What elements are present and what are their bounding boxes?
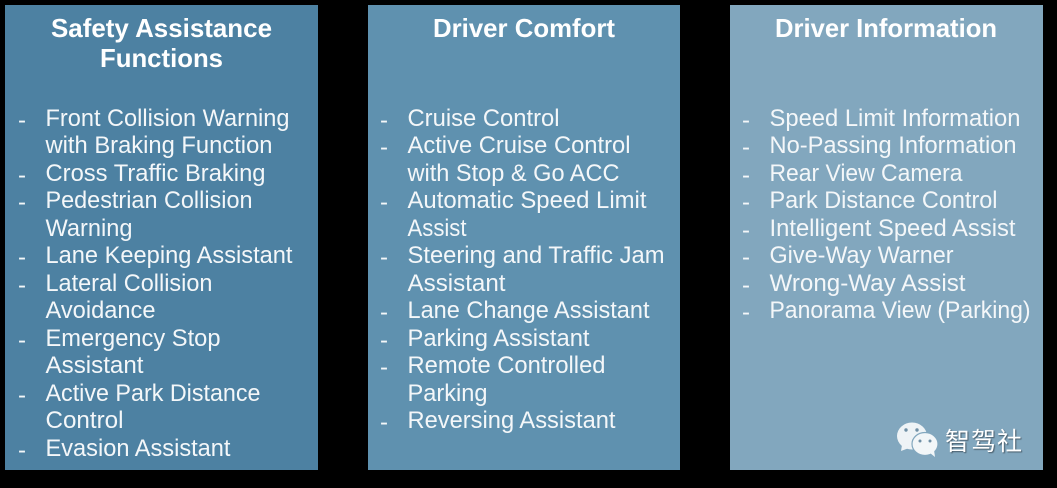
list: safety functions: Lane Keeping Assistant bbox=[46, 242, 293, 269]
list: safety functions: - bbox=[18, 437, 26, 464]
list: information functions: Intelligent Speed Assist bbox=[770, 215, 1016, 242]
list: information functions: Speed Limit Information bbox=[770, 105, 1020, 132]
list: comfort functions: - bbox=[380, 409, 388, 436]
list: information functions: No-Passing Information bbox=[770, 132, 1016, 159]
heading: safety assistance functions: Functions bbox=[100, 43, 223, 73]
list: safety functions: Assistant bbox=[46, 352, 144, 379]
heading: safety assistance functions bbox=[51, 13, 272, 73]
list: safety functions: Pedestrian Collision bbox=[46, 187, 252, 214]
list: comfort functions: Parking Assistant bbox=[408, 325, 590, 352]
list: information functions: - bbox=[742, 134, 750, 161]
watermark text: 智驾社 bbox=[945, 428, 1022, 456]
list: safety functions: - bbox=[18, 327, 26, 354]
list: information functions: - bbox=[742, 189, 750, 216]
list: safety functions: Cross Traffic Braking bbox=[46, 160, 266, 187]
list: information functions: - bbox=[742, 272, 750, 299]
icon: wechat bubbles bbox=[897, 422, 938, 457]
list: safety functions: - bbox=[18, 107, 26, 134]
list: safety functions: Avoidance bbox=[46, 297, 156, 324]
list: information functions: Wrong-Way Assist bbox=[770, 270, 966, 297]
list: information functions: - bbox=[742, 162, 750, 189]
list: comfort functions: - bbox=[380, 327, 388, 354]
list: comfort functions: - bbox=[380, 244, 388, 271]
list: information functions bbox=[742, 105, 1030, 326]
panel: driver comfort bbox=[368, 5, 680, 470]
heading: driver comfort: Driver Comfort bbox=[433, 13, 615, 43]
list: comfort functions: Assistant bbox=[408, 270, 506, 297]
list: comfort functions: Reversing Assistant bbox=[408, 407, 616, 434]
list: safety functions: Evasion Assistant bbox=[46, 435, 231, 462]
list: information functions: - bbox=[742, 244, 750, 271]
list: information functions: - bbox=[742, 107, 750, 134]
list: comfort functions: - bbox=[380, 299, 388, 326]
list: comfort functions: Lane Change Assistant bbox=[408, 297, 650, 324]
list: safety functions: Front Collision Warning bbox=[46, 105, 290, 132]
list: safety functions: - bbox=[18, 272, 26, 299]
list: safety functions: Warning bbox=[46, 215, 132, 242]
list: information functions: Panorama View (Parking) bbox=[770, 297, 1030, 324]
list: safety functions: - bbox=[18, 162, 26, 189]
list: safety functions: Lateral Collision bbox=[46, 270, 212, 297]
list: information functions: Rear View Camera bbox=[770, 160, 963, 187]
list: safety functions: - bbox=[18, 382, 26, 409]
heading: driver information: Driver Information bbox=[775, 13, 997, 43]
list: comfort functions: Automatic Speed Limit bbox=[408, 187, 647, 214]
list: information functions: - bbox=[742, 217, 750, 244]
list: comfort functions: Remote Controlled bbox=[408, 352, 606, 379]
list: comfort functions: - bbox=[380, 354, 388, 381]
heading: safety assistance functions: Safety Assistance bbox=[51, 13, 272, 43]
list: safety functions: - bbox=[18, 189, 26, 216]
list: comfort functions bbox=[380, 105, 664, 436]
list: safety functions bbox=[18, 105, 293, 464]
list: comfort functions: with Stop & Go ACC bbox=[407, 160, 620, 187]
list: safety functions: Emergency Stop bbox=[46, 325, 220, 352]
panel: safety assistance functions bbox=[5, 5, 318, 470]
list: comfort functions: Assist bbox=[408, 215, 467, 242]
list: comfort functions: Parking bbox=[408, 380, 488, 407]
list: safety functions: with Braking Function bbox=[45, 132, 272, 159]
list: safety functions: Active Park Distance bbox=[46, 380, 260, 407]
list: safety functions: - bbox=[18, 244, 26, 271]
panel: driver information bbox=[730, 5, 1043, 470]
list: information functions: Park Distance Control bbox=[770, 187, 998, 214]
list: information functions: - bbox=[742, 299, 750, 326]
list: comfort functions: - bbox=[380, 107, 388, 134]
list: comfort functions: Cruise Control bbox=[408, 105, 560, 132]
list: information functions: Give-Way Warner bbox=[770, 242, 954, 269]
list: comfort functions: - bbox=[380, 134, 388, 161]
list: safety functions: Control bbox=[46, 407, 124, 434]
list: comfort functions: - bbox=[380, 189, 388, 216]
list: comfort functions: Steering and Traffic Jam bbox=[408, 242, 664, 269]
list: comfort functions: Active Cruise Control bbox=[408, 132, 630, 159]
